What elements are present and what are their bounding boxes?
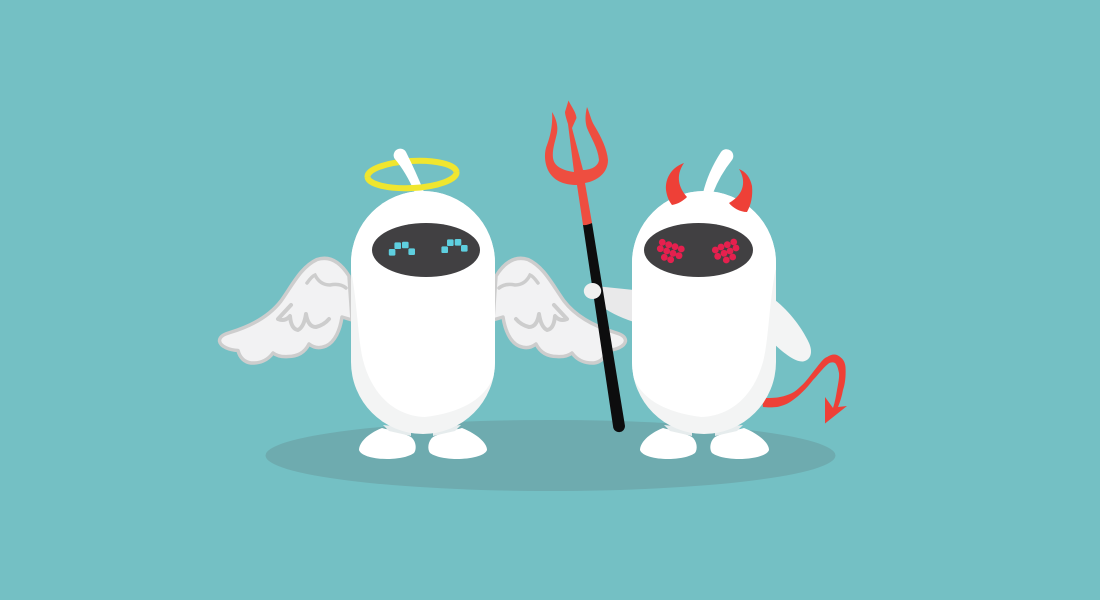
devil hand	[584, 283, 601, 299]
pitchfork black shaft	[583, 223, 625, 432]
angel visor	[372, 223, 480, 277]
angel robot	[345, 149, 500, 459]
halo back	[367, 161, 456, 177]
devil feet	[640, 425, 769, 459]
devil tail	[762, 355, 847, 424]
devil antenna	[703, 149, 733, 193]
angel feet	[359, 425, 487, 459]
angel body	[351, 191, 495, 434]
ground shadow	[266, 420, 836, 491]
devil right arm	[774, 300, 811, 362]
devil body highlight	[627, 185, 782, 417]
angel happy eyes	[389, 239, 468, 256]
halo front	[368, 172, 457, 188]
pitchfork red head	[545, 100, 608, 225]
angel body highlight	[345, 185, 500, 417]
devil robot	[627, 149, 782, 459]
devil body	[632, 191, 776, 434]
devil left arm	[597, 286, 634, 322]
devil visor	[644, 223, 753, 277]
angel left wing	[220, 258, 352, 363]
devil heart eyes	[657, 239, 739, 263]
devil left horn	[666, 163, 687, 205]
angel antenna	[394, 149, 424, 193]
devil right horn	[729, 169, 752, 212]
angel right wing	[493, 258, 626, 363]
pitchfork	[545, 100, 625, 432]
illustration: angel and devil robots	[218, 100, 847, 491]
